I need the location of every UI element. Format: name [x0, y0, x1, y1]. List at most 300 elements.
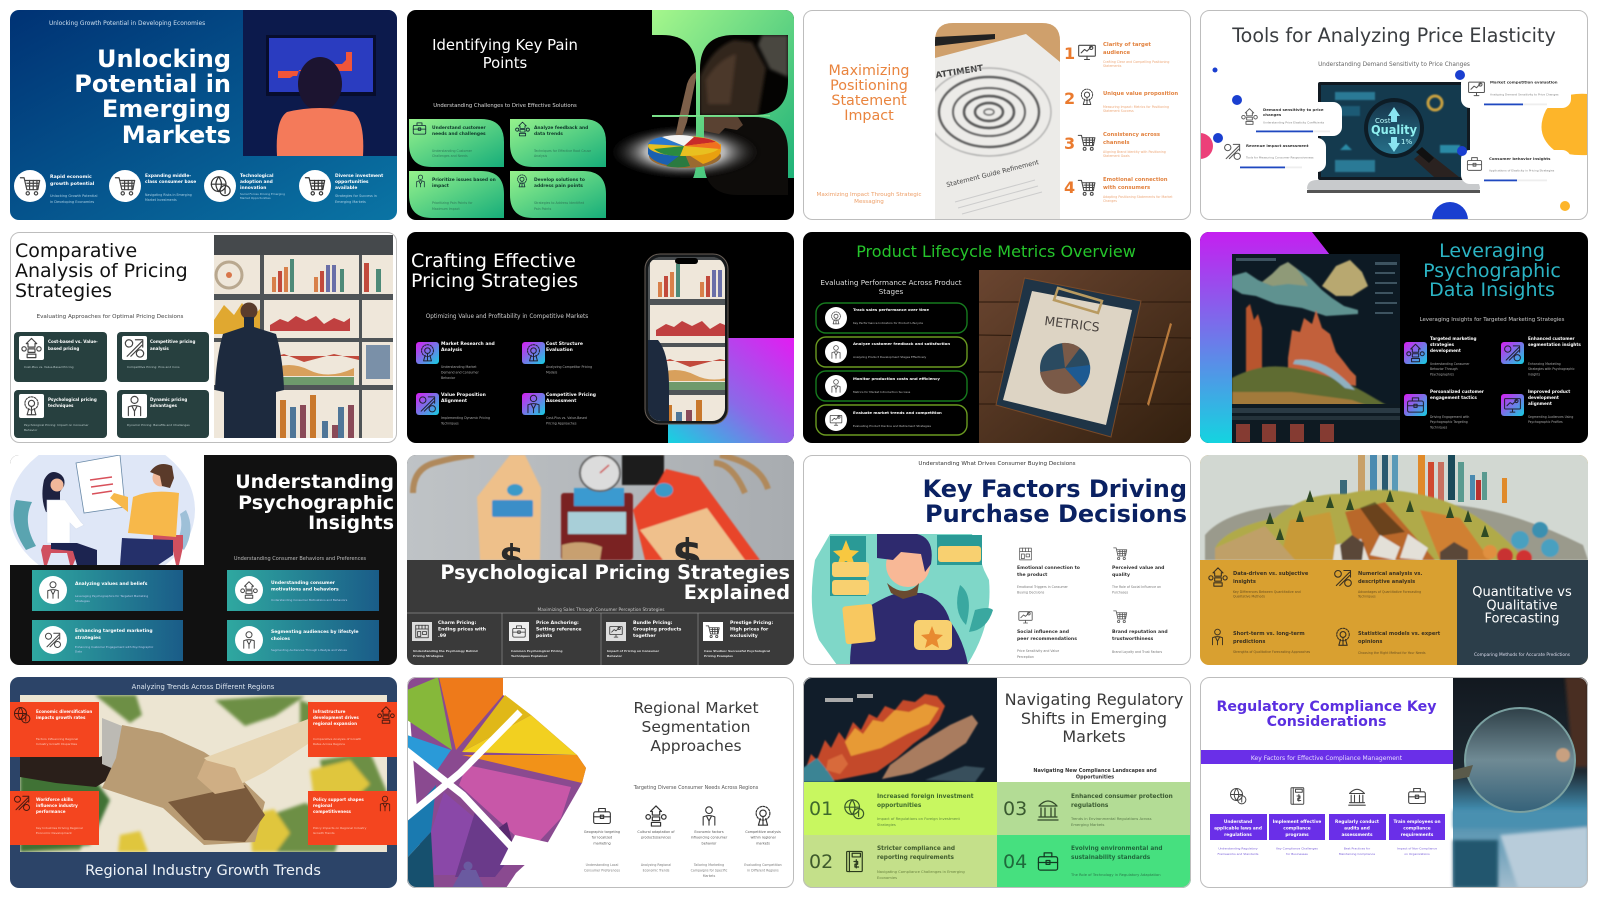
- title: Identifying Key Pain: [432, 37, 578, 54]
- title: Psychological Pricing Strategies: [440, 561, 790, 584]
- cell 02: Navigating Compliance Challenges in Emerging: [877, 870, 965, 874]
- step: train employees: [1389, 788, 1445, 856]
- card: enhancing targeted marketing: strategies: [75, 635, 101, 641]
- card: policy support: regional: [313, 803, 333, 808]
- cell 03: 03: [1003, 798, 1027, 820]
- feature: rapid economic growth: Rapid economic: [50, 174, 92, 180]
- item 2: 2: [1064, 89, 1075, 108]
- panel: Understanding Psychographic Insights: [9, 435, 397, 665]
- card: workforce skills: Key Industries Driving Regional: [36, 826, 83, 830]
- card: analyze feedback: Techniques for Effective Root Cause: [533, 149, 591, 153]
- item 2: [1064, 89, 1178, 113]
- item: competitive pricing assessment: [522, 392, 596, 426]
- cell 03: regulations: [1071, 803, 1109, 809]
- step: train employees: Impact of Non-Compliance: [1397, 846, 1437, 850]
- factor: emotional connection: Emotional Triggers in Consumer: [1017, 585, 1069, 589]
- card: consumer behavior: Consumer behavior insights: [1489, 156, 1551, 161]
- card: enhancing targeted marketing: [32, 620, 183, 661]
- subtitle: Evaluating Performance Across Product: [820, 278, 962, 287]
- photo: handshake over world map: [20, 695, 387, 852]
- item: value proposition: Value Proposition: [441, 392, 486, 398]
- column: bundle pricing: Bundle Pricing:: [633, 620, 673, 626]
- column: charm pricing: [412, 620, 486, 658]
- item: value proposition: Implementing Dynamic Pricing: [441, 416, 490, 420]
- item 4: Changes: [1103, 199, 1117, 203]
- card: policy support: Policy support shapes: [313, 797, 364, 802]
- card: dynamic pricing: Dynamic Pricing: Benefits and Challenges: [127, 423, 190, 427]
- panel: Maximizing Positioning Statement Impact: [817, 23, 1178, 219]
- item 3: [1064, 132, 1166, 158]
- feature: technological adoption: Market Opportunities: [240, 196, 271, 200]
- column: prestige pricing: Case Studies: Successful Psychological: [704, 649, 770, 653]
- illustration: man rating with stars: [812, 534, 993, 665]
- cell 03: Trends in Environmental Regulations Across: [1070, 817, 1152, 821]
- subtitle: Maximizing Impact Through Strategic: [817, 192, 921, 198]
- card: segmenting audiences: choices: [271, 636, 290, 642]
- card: cost-based vs value-based: Cost-based vs. Value-: [48, 339, 98, 344]
- factor: social influence: Perception: [1017, 655, 1034, 659]
- item 4: Emotional connection: [1103, 177, 1168, 183]
- graphic: green frame with hand and pie photo: [607, 10, 794, 195]
- card: prioritize issues: Maximum Impact: [432, 207, 460, 211]
- card: workforce skills: Economic Development: [36, 831, 72, 835]
- feature: diverse investment: Strategies for Success in: [335, 194, 377, 198]
- panel: Tools for Analyzing Price Elasticity: [1201, 27, 1587, 219]
- card: economic diversification: Factors Influencing Regional: [36, 737, 78, 741]
- card: competitive pricing: Competitive Pricing: Pros and Cons: [127, 365, 180, 369]
- card: understanding motivations: Understanding Consumer Motivations and Behaviors: [271, 598, 348, 602]
- column: bundle pricing: Impact of Pricing on Consumer: [607, 649, 660, 653]
- photo: target diagram on paper: Statement Guide Refinement: [946, 158, 1040, 189]
- factor: brand reputation: [1112, 611, 1168, 654]
- item: market research: Demand and Consumer: [441, 370, 479, 374]
- column: geographic targeting: Understanding Local: [586, 863, 618, 867]
- card: understand customer needs: Understand customer: [432, 125, 486, 131]
- cell 04: 04: [1003, 851, 1027, 873]
- card: workforce skills: performance: [36, 809, 66, 814]
- feature: diverse investment: available: [335, 185, 357, 191]
- card: consumer behavior: Applications of Elasticity in Pricing Strategies: [1489, 168, 1555, 172]
- item 4: with consumers: [1103, 185, 1150, 191]
- feature: expanding middle class: Market Investments: [145, 198, 177, 202]
- phone mockup: [600, 240, 779, 443]
- step: train employees: requirements: [1401, 832, 1434, 838]
- title: Qualitative: [1486, 598, 1558, 614]
- title: Comparative: [15, 240, 137, 262]
- title: Positioning: [830, 78, 908, 94]
- card: infrastructure: Rates Across Regions: [313, 742, 345, 746]
- card: infrastructure: Comparative Analysis of Growth: [313, 737, 361, 741]
- title: Markets: [1062, 727, 1126, 746]
- card: prioritize issues: [409, 171, 504, 218]
- column: price anchoring: points: [536, 633, 552, 639]
- panel: Navigating Regulatory Shifts in Emerging Markets: [803, 677, 1191, 888]
- step: understand laws: Frameworks and Standards: [1218, 852, 1259, 856]
- title: Key Factors Driving: [923, 475, 1187, 503]
- card: understanding motivations: [227, 570, 379, 611]
- item 3: Consistency across: [1103, 132, 1160, 138]
- panel: Psychological Pricing Strategies Explained: [407, 455, 794, 665]
- cell 02: reporting requirements: [877, 855, 955, 861]
- factor: emotional connection: the product: [1017, 572, 1048, 578]
- factor: perceived value: Purchases: [1112, 590, 1128, 594]
- item 1: Statements: [1103, 64, 1122, 68]
- step: conduct audits: audits and: [1344, 826, 1370, 832]
- item: enhanced segmentation: Enhancing Marketing: [1528, 362, 1561, 366]
- item 1: Clarity of target: [1103, 42, 1151, 48]
- item: enhanced segmentation: segmentation insights: [1528, 342, 1581, 347]
- feature: diverse investment: [299, 170, 383, 204]
- metric row: customer feedback: [816, 337, 967, 367]
- card: psychological pricing: techniques: [48, 403, 74, 408]
- column: price anchoring: [509, 620, 582, 658]
- factor: perceived value: quality: [1112, 572, 1130, 578]
- laptop with magnifier: 1%: [1401, 138, 1412, 146]
- subtitle: Messaging: [854, 199, 884, 205]
- column: price anchoring: Common Psychological Pricing: [511, 649, 563, 653]
- title: Pricing Strategies: [411, 270, 578, 292]
- card: market competition: Market competition evaluation: [1490, 80, 1558, 84]
- item 1: 1: [1064, 44, 1075, 63]
- factor: data-driven: Key Differences Between Quantitative and: [1233, 590, 1301, 594]
- title: Understanding: [235, 471, 394, 493]
- item: targeted marketing: [1404, 336, 1477, 376]
- column: prestige pricing: Pricing Examples: [704, 654, 733, 658]
- subtitle: Maximizing Sales Through Consumer Perception Strategies: [537, 607, 665, 613]
- column: price anchoring: Techniques Explained: [511, 654, 547, 658]
- gradient corner shape: [1200, 232, 1330, 443]
- subtitle: Comparing Methods for Accurate Predictions: [1474, 652, 1571, 658]
- card: segmenting audiences: [227, 620, 379, 661]
- item: value proposition: [416, 392, 490, 426]
- card: demand sensitivity: Demand sensitivity to price: [1263, 107, 1324, 112]
- column: charm pricing: Understanding the Psychology Behind: [413, 649, 478, 653]
- feature: expanding middle class: [109, 170, 196, 202]
- card: dynamic pricing: advantages: [150, 403, 177, 408]
- title: Maximizing: [828, 63, 910, 79]
- card: develop solutions: Strategies to Address Identified: [534, 201, 584, 205]
- panel: Quantitative vs Qualitative Forecasting: [1200, 455, 1588, 665]
- item: enhanced segmentation: [1501, 336, 1581, 376]
- factor: statistical: Statistical models vs. expert: [1358, 631, 1441, 637]
- card: cost-based vs value-based: [14, 332, 107, 382]
- photo: woman viewing chart screen: [243, 10, 397, 156]
- cell 04: Evolving environmental and: [1071, 846, 1163, 852]
- factor: short-term: [1213, 629, 1311, 654]
- metric row: market trends: Evaluating Product Decline and Retirement Strategies: [853, 424, 931, 428]
- item: targeted marketing: development: [1430, 348, 1461, 353]
- column: competitive analysis: [744, 806, 782, 872]
- title: Markets: [122, 121, 231, 149]
- step: implement programs: compliance: [1283, 826, 1311, 832]
- card: infrastructure: [308, 702, 397, 757]
- column: cultural adaptation: [637, 806, 675, 872]
- panel: Unlocking Potential in Emerging Markets: [10, 10, 397, 220]
- card: infrastructure: regional expansion: [313, 721, 357, 726]
- item: competitive pricing assessment: Assessment: [546, 398, 577, 404]
- column: price anchoring: Price Anchoring:: [536, 620, 579, 626]
- column: charm pricing: Ending prices with: [438, 626, 486, 632]
- column: cultural adaptation: Economic Trends: [643, 868, 670, 872]
- item 4: [1064, 177, 1173, 203]
- item: personalized engagement: Psychographic Targeting: [1430, 420, 1468, 424]
- card: competitive pricing: [117, 332, 209, 382]
- step: implement programs: Implement effective: [1273, 819, 1321, 825]
- card: dynamic pricing: [117, 390, 209, 438]
- cell 03: Enhanced consumer protection: [1071, 794, 1173, 800]
- item: competitive pricing assessment: Pricing Approaches: [546, 422, 577, 426]
- photo: price tags and scale: $: [499, 538, 524, 579]
- card: analyzing values: Analyzing values and beliefs: [75, 581, 148, 587]
- title: Quantitative vs: [1472, 585, 1572, 600]
- item: market research: Analysis: [441, 347, 462, 353]
- title: Potential in: [74, 70, 231, 98]
- subtitle: Optimizing Value and Profitability in Competitive Markets: [426, 314, 588, 320]
- title: Product Lifecycle Metrics Overview: [856, 242, 1136, 261]
- column: economic factors: Economic factors: [694, 830, 724, 834]
- panel: Crafting Effective Pricing Strategies: [407, 232, 794, 443]
- cell 04: The Role of Technology in Regulatory Adaptation: [1070, 873, 1161, 877]
- column: cultural adaptation: Analyzing Regional: [641, 863, 671, 867]
- cell 02: [803, 835, 997, 888]
- laptop with magnifier: Cost: [1375, 117, 1391, 125]
- item: improved product: Improved product: [1528, 389, 1570, 394]
- item 1: [1064, 42, 1169, 68]
- item: enhanced segmentation: Enhanced customer: [1528, 336, 1575, 341]
- photo: target diagram on paper: [927, 23, 1060, 220]
- factor: data-driven: insights: [1233, 579, 1256, 585]
- factor: numerical: Advantages of Quantitative Forecasting: [1358, 590, 1421, 594]
- factor: perceived value: Perceived value and: [1112, 565, 1164, 571]
- card: policy support: Growth Trends: [313, 831, 335, 835]
- title: Tools for Analyzing Price Elasticity: [1231, 24, 1556, 47]
- item: personalized engagement: Driving Engagement with: [1430, 415, 1469, 419]
- title: Data Insights: [1429, 279, 1555, 301]
- column: cultural adaptation: Cultural adaptation of: [637, 830, 675, 834]
- item: market research: Understanding Market: [441, 365, 477, 369]
- card: understand customer needs: needs and challenges: [432, 131, 486, 137]
- column: charm pricing: .99: [438, 633, 446, 639]
- card: policy support: [308, 791, 397, 845]
- photo: metrics clipboard on wood: METRICS: [1044, 313, 1100, 335]
- item 3: Aligning Brand Identity with Positioning: [1103, 150, 1166, 154]
- title: Insights: [308, 512, 394, 534]
- cell 03: [997, 782, 1191, 835]
- title: Psychographic: [238, 492, 394, 514]
- card: psychological pricing: Psychological pricing: [48, 397, 97, 402]
- title: Regional Industry Growth Trends: [85, 863, 321, 879]
- column: geographic targeting: marketing: [593, 842, 611, 846]
- metric row: production costs: Metrics for Market Introduction Success: [853, 390, 911, 394]
- factor: social influence: Price Sensitivity and Value: [1017, 649, 1059, 653]
- card: prioritize issues: Prioritize issues based on: [432, 177, 496, 183]
- item 2: Measuring Impact: Metrics for Positioning: [1103, 105, 1169, 109]
- card: analyze feedback: Analysis: [534, 154, 547, 158]
- feature: technological adoption: adoption and: [240, 179, 273, 185]
- column: geographic targeting: Consumer Preferences: [584, 868, 620, 872]
- card: revenue impact: [1213, 133, 1326, 172]
- card: policy support: Policy Impacts on Regional Industry: [313, 826, 367, 830]
- factor: emotional connection: Buying Decisions: [1017, 590, 1045, 594]
- subtitle: Understanding Consumer Behaviors and Preferences: [234, 556, 367, 562]
- title: Regional Market: [633, 699, 759, 717]
- decorative blobs: [1201, 68, 1587, 219]
- item: competitive pricing assessment: Cost-Plus vs. Value-Based: [546, 416, 587, 420]
- item: cost structure: Evaluation: [546, 347, 573, 353]
- feature: expanding middle class: class consumer base: [145, 179, 196, 185]
- column: bundle pricing: Behavior: [607, 654, 623, 658]
- title: Emerging: [102, 95, 231, 123]
- item: improved product: Psychographic Profiles: [1528, 420, 1563, 424]
- item: targeted marketing: Understanding Consumer: [1430, 362, 1470, 366]
- card: enhancing targeted marketing: Data: [75, 650, 82, 654]
- card: demand sensitivity: changes: [1263, 112, 1282, 117]
- card: cost-based vs value-based: Cost-Plus vs. Value-Based Pricing: [24, 365, 74, 369]
- column: prestige pricing: Prestige Pricing:: [730, 620, 773, 626]
- title: Explained: [684, 581, 790, 604]
- card: economic diversification: Economic diversification: [36, 709, 92, 714]
- cell 01: Increased foreign investment: [877, 794, 974, 800]
- gradient block: [668, 338, 794, 443]
- photo: terrain data chart: [803, 677, 997, 782]
- step: train employees: Train employees on: [1393, 819, 1441, 825]
- card: economic diversification: Industry Growth Disparities: [36, 742, 77, 746]
- feature: diverse investment: Emerging Markets: [335, 200, 366, 204]
- metric row: sales performance: [816, 303, 967, 333]
- item: personalized engagement: Techniques: [1429, 426, 1448, 430]
- cell 01: Impact of Regulations on Foreign Investment: [877, 817, 960, 821]
- subtitle: Evaluating Approaches for Optimal Pricing Decisions: [37, 314, 184, 320]
- feature: rapid economic growth: [14, 170, 98, 204]
- laptop with magnifier: Quality: [1371, 123, 1417, 137]
- item 4: 4: [1064, 178, 1075, 197]
- factor: brand reputation: trustworthiness: [1112, 636, 1153, 642]
- metric row: sales performance: Track sales performance over time: [853, 307, 929, 312]
- feature: rapid economic growth: Unlocking Growth Potential: [50, 194, 98, 198]
- card: develop solutions: Pain Points: [534, 207, 552, 211]
- title: Segmentation: [642, 718, 750, 736]
- factor: data-driven: Qualitative Methods: [1233, 594, 1265, 598]
- step: implement programs: programs: [1285, 832, 1309, 838]
- factor: short-term: predictions: [1233, 639, 1265, 645]
- column: prestige pricing: exclusivity: [730, 633, 758, 639]
- item: targeted marketing: Behavior Through: [1430, 367, 1458, 371]
- column: economic factors: Campaigns for Specific: [691, 868, 728, 872]
- card: develop solutions: address pain points: [534, 183, 583, 189]
- step: understand laws: regulations: [1224, 832, 1252, 838]
- metric row: customer feedback: Analyze customer feedback and satisfaction: [853, 341, 950, 346]
- column: price anchoring: Setting reference: [536, 626, 582, 632]
- step: conduct audits: assessments: [1341, 832, 1373, 838]
- card: understand customer needs: [409, 119, 504, 167]
- item: cost structure: [522, 341, 592, 374]
- item: improved product: [1501, 389, 1573, 424]
- card: competitive pricing: Competitive pricing: [150, 339, 195, 344]
- card: understand customer needs: Understanding Customer: [432, 149, 473, 153]
- card: develop solutions: [510, 171, 606, 218]
- column: geographic targeting: for localized: [592, 836, 612, 840]
- column: bundle pricing: Grouping products: [633, 626, 682, 632]
- factor: emotional connection: [1017, 548, 1080, 594]
- column: competitive analysis: in Different Regions: [747, 868, 779, 872]
- title: Considerations: [1267, 714, 1386, 730]
- title: Shifts in Emerging: [1021, 709, 1167, 728]
- card: market competition: [1455, 70, 1571, 108]
- factor: statistical: opinions: [1358, 639, 1382, 645]
- card: analyzing values: Leveraging Psychographics for Targeted Marketing: [75, 594, 148, 598]
- item: enhanced segmentation: Insights: [1528, 372, 1540, 376]
- photo: target diagram on paper: ATTIMENT: [935, 64, 984, 81]
- card: segmenting audiences: Segmenting audiences by lifestyle: [271, 629, 359, 635]
- item: improved product: Segmenting Audiences Using: [1528, 415, 1573, 419]
- step: understand laws: applicable laws and: [1214, 826, 1262, 832]
- column: bundle pricing: together: [633, 633, 656, 639]
- title: Approaches: [650, 737, 742, 755]
- card: prioritize issues: Prioritizing Pain Points for: [432, 201, 473, 205]
- item: cost structure: Models: [546, 370, 558, 374]
- title: Analysis of Pricing: [15, 260, 188, 282]
- panel: Comparative Analysis of Pricing Strategies: [10, 232, 397, 443]
- column: economic factors: behavior: [702, 842, 717, 846]
- laptop with magnifier: [1307, 82, 1480, 193]
- card: psychological pricing: Psychological Pricing: Impact on Consumer: [24, 423, 89, 427]
- item 2: Unique value proposition: [1103, 91, 1178, 97]
- card: consumer behavior: [1457, 146, 1571, 184]
- card: revenue impact: Revenue impact assessment: [1246, 143, 1309, 148]
- subtitle: Understanding Demand Sensitivity to Price Changes: [1318, 62, 1470, 68]
- dividers: [407, 613, 794, 665]
- item: market research: Behavior: [441, 376, 456, 380]
- column: economic factors: [691, 807, 728, 878]
- subtitle: Analyzing Trends Across Different Regions: [132, 683, 275, 691]
- step: conduct audits: Regularly conduct: [1335, 819, 1379, 825]
- factor: numerical: Techniques: [1357, 594, 1376, 598]
- item 1: Crafting Clear and Compelling Positioning: [1103, 60, 1169, 64]
- factor: brand reputation: Brand Loyalty and Trust Factors: [1112, 650, 1163, 654]
- card: dynamic pricing: Dynamic pricing: [150, 397, 187, 402]
- factor: perceived value: [1111, 548, 1164, 594]
- card: infrastructure: development drives: [313, 715, 359, 720]
- item: improved product: alignment: [1528, 401, 1552, 406]
- feature: technological adoption: innovation: [240, 185, 266, 191]
- cell 01: [803, 782, 997, 835]
- photo: 3D terrain with bar charts: [1200, 455, 1588, 566]
- metric row: production costs: [816, 371, 967, 401]
- card: policy support: competitiveness: [313, 809, 352, 814]
- subtitle: Opportunities: [1076, 774, 1114, 780]
- factor: social influence: peer recommendations: [1017, 636, 1077, 642]
- item 1: audience: [1103, 50, 1130, 56]
- photo: metrics clipboard on wood: [979, 270, 1191, 443]
- column: cultural adaptation: products/services: [641, 836, 671, 840]
- step: implement programs: [1269, 788, 1325, 856]
- metric row: sales performance: Key Performance Indicators for Product Lifecycle: [853, 321, 923, 325]
- cell 03: Emerging Markets: [1071, 823, 1105, 827]
- panel: Regional Industry Growth Trends: [10, 677, 397, 888]
- step: understand laws: Understand: [1224, 819, 1252, 825]
- card: economic diversification: [10, 702, 99, 757]
- feature: technological adoption: Technological: [240, 173, 274, 179]
- item: personalized engagement: [1404, 389, 1485, 430]
- graphic: exploded 3D pie chart: [403, 677, 596, 888]
- item: value proposition: Techniques: [440, 422, 459, 426]
- card: understanding motivations: Understanding consumer: [271, 580, 336, 586]
- column: prestige pricing: [703, 620, 773, 658]
- item 3: Statement Goals: [1103, 154, 1130, 158]
- cell 02: Stricter compliance and: [877, 846, 955, 852]
- item: personalized engagement: engagement tactics: [1430, 395, 1477, 400]
- column: economic factors: Markets: [703, 874, 716, 878]
